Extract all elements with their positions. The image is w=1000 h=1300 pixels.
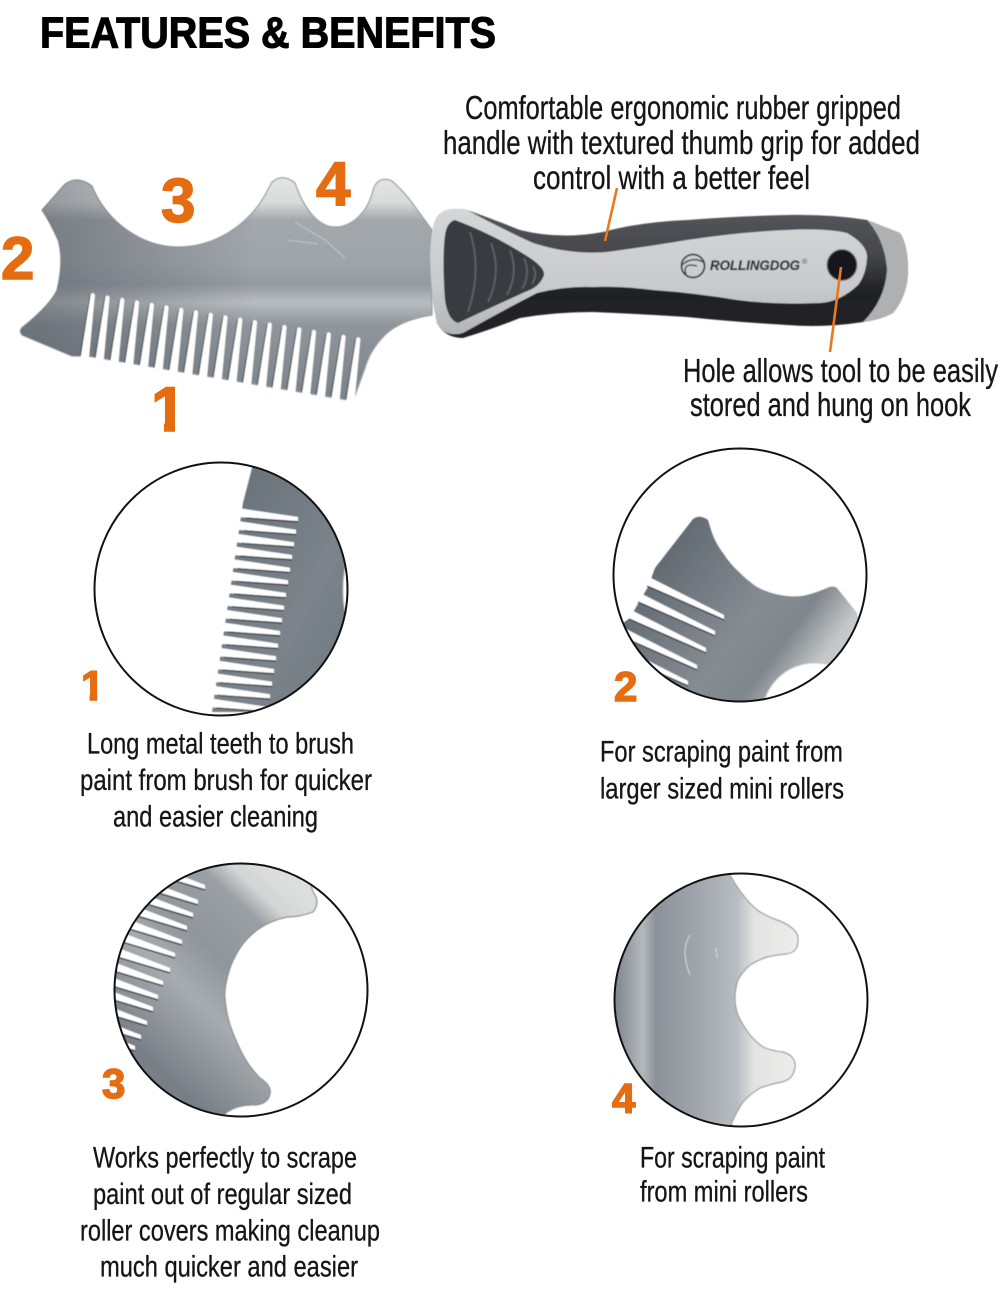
main tool illustration — [20, 178, 908, 420]
text: caption 3 — [80, 1142, 380, 1284]
number 4: 4 — [316, 150, 351, 219]
text: caption 3: paint out of regular sized — [93, 1178, 352, 1211]
callout: handle text — [443, 89, 920, 196]
detail circle 2: end scraper — [612, 448, 868, 702]
text: caption 1: and easier cleaning — [113, 800, 318, 834]
number 2: 2 — [1, 225, 34, 292]
label number 1: 1 — [81, 662, 104, 709]
text: caption 2 — [600, 736, 844, 806]
logo — [682, 254, 808, 278]
title: FEATURES & BENEFITS — [40, 8, 496, 58]
detail circle 4: small notch — [614, 872, 868, 1128]
text: caption 2: For scraping paint from — [600, 736, 843, 768]
hanging hole — [827, 250, 857, 280]
callout: handle text: control with a better feel — [533, 159, 810, 196]
label number 2: 2 — [614, 663, 637, 710]
text: caption 3: much quicker and easier — [100, 1250, 358, 1284]
text: caption 4: For scraping paint — [640, 1142, 826, 1174]
logo: ROLLINGDOG — [710, 257, 800, 273]
detail circle 3: large notch — [114, 862, 368, 1118]
arrow: hole callout line — [830, 267, 841, 352]
text: caption 3: Works perfectly to scrape — [93, 1142, 357, 1174]
metal blade with comb teeth — [20, 178, 432, 420]
text: caption 2: larger sized mini rollers — [600, 772, 844, 806]
label number 3: 3 — [102, 1060, 125, 1107]
callout: hole text — [683, 352, 998, 423]
text: caption 4: from mini rollers — [640, 1176, 808, 1208]
text: caption 1: paint from brush for quicker — [80, 764, 372, 797]
thumb grip — [444, 220, 544, 323]
number 1: 1 — [151, 375, 186, 445]
text: caption 1 — [80, 728, 372, 834]
arrow: handle callout line — [605, 188, 617, 241]
text: caption 1: Long metal teeth to brush — [87, 728, 354, 760]
label number 4: 4 — [612, 1075, 636, 1122]
handle — [430, 209, 908, 338]
logo: ® — [802, 258, 808, 266]
text: caption 4 — [640, 1142, 826, 1208]
number 3: 3 — [161, 167, 195, 236]
detail circle 1: teeth — [94, 450, 361, 716]
text: caption 3: roller covers making cleanup — [80, 1214, 380, 1248]
